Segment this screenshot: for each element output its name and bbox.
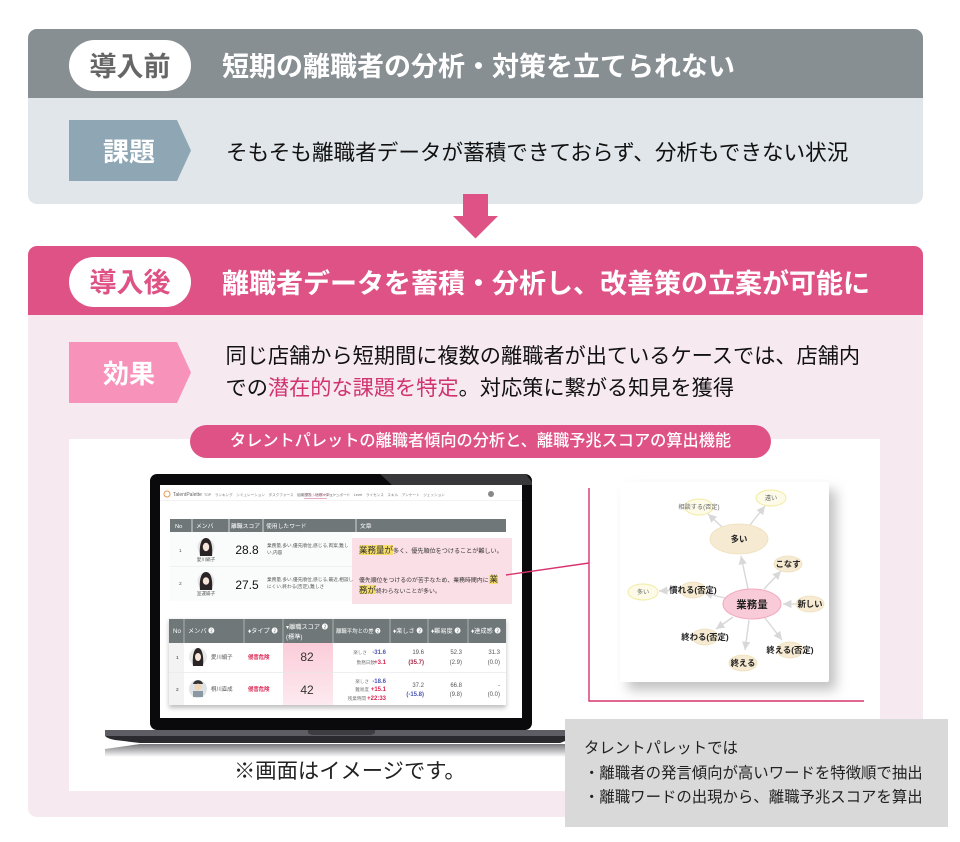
note: image only: ※画面はイメージです。 — [234, 759, 466, 783]
table: score: (-15.8) — [406, 692, 424, 698]
before header band — [28, 29, 923, 98]
table: score — [169, 619, 506, 708]
connector line and bracket — [506, 488, 864, 701]
table: score: - — [498, 683, 500, 689]
table: score: ♦達成感 ❷ — [471, 627, 501, 635]
table: score: 桐川直成 — [211, 685, 233, 693]
table: score: 離職平均との差 ❷ — [336, 627, 381, 635]
table: score: (0.0) — [488, 660, 500, 666]
callout text: ・離職者の発言傾向が高いワードを特徴順で抽出 — [584, 764, 923, 782]
word network card: 業務量 — [736, 598, 768, 611]
table: score: No — [173, 628, 181, 635]
table: score: 2 — [176, 687, 179, 693]
word network card: 相談する(否定) — [678, 503, 720, 511]
table: score: 楽しさ — [353, 649, 367, 656]
table: retention words: 愛川絹子 — [197, 556, 216, 563]
arrow: down — [453, 194, 498, 238]
table: score: メンバ ❷ — [188, 627, 214, 635]
table: score: +3.1 — [374, 660, 387, 666]
callout text: ・離職ワードの出現から、離職予兆スコアを算出 — [584, 789, 923, 806]
laptop — [105, 474, 578, 757]
table: score: 愛川絹子 — [211, 653, 233, 661]
issue text: そもそも離職者データが蓄積できておらず、分析もできない状況 — [226, 140, 848, 165]
table: score: 難易度 — [355, 686, 369, 693]
table: retention words: 2 — [179, 581, 182, 587]
callout text: タレントパレットでは — [584, 740, 738, 757]
word network card: こなす — [775, 559, 801, 569]
table: score: (0.0) — [488, 692, 500, 698]
word network card: 新しい — [797, 599, 823, 609]
table: retention words: 使用したワード — [266, 522, 307, 530]
table: score: -31.6 — [372, 650, 387, 656]
app nav bar: ダッシュボード Level ライセンス スキル アンケート ジェッション — [325, 492, 445, 497]
table: retention words: 1 — [179, 548, 182, 554]
table: retention words: い,内容 — [267, 549, 283, 556]
before heading: 短期の離職者の分析・対策を立てられない — [222, 52, 735, 82]
table: score: 37.2 — [412, 683, 425, 689]
subtitle pill: タレントパレットの離職者傾向の分析と、離職予兆スコアの算出機能 — [230, 432, 731, 450]
table: score: 52.3 — [450, 650, 463, 656]
word network card: 多い — [731, 534, 747, 544]
after pill background — [69, 257, 191, 307]
table: retention words — [170, 519, 512, 604]
effect text — [226, 345, 860, 400]
table: score: 楽しさ — [355, 678, 369, 685]
after header band — [28, 246, 923, 315]
table: retention words: 文章 — [360, 522, 372, 530]
panel: before — [28, 29, 923, 204]
table: score: 勤務日数 — [357, 659, 375, 666]
table: retention words: にくい,終わる(否定),難しさ — [267, 583, 325, 590]
table: score: 82 — [300, 650, 314, 664]
before pill label: 導入前 — [90, 52, 170, 82]
table: score: ♦難易度 ❷ — [431, 627, 461, 635]
after heading: 離職者データを蓄積・分析し、改善策の立案が可能に — [222, 269, 870, 299]
table: score: +15.1 — [371, 687, 387, 693]
white content area — [69, 439, 880, 791]
table: retention words: メンバ — [196, 523, 214, 530]
table: score: 侵害危険 — [248, 653, 270, 661]
table: score: 66.8 — [450, 683, 463, 689]
table: score: 残業時間 — [348, 695, 366, 702]
effect text: 同じ店舗から短期間に複数の離職者が出ているケースでは、店舗内 — [226, 345, 860, 368]
table: retention words: 優先順位をつけるのが苦手なため、業務時間内に — [359, 578, 489, 584]
word network card: 慣れる(否定) — [669, 585, 717, 595]
word network card — [620, 482, 836, 690]
callout: summary — [565, 719, 948, 827]
app nav bar: TOP ランキング シミュレーション タスクフォース 組織图表 研修メニュー — [204, 492, 337, 497]
table: score: ♦楽しさ ❷ — [393, 627, 423, 635]
word network card: 終える(否定) — [766, 645, 814, 655]
before pill background — [69, 40, 191, 91]
table: score: 31.3 — [488, 650, 501, 656]
table: score: 42 — [300, 683, 314, 697]
table: score: ▾離職スコア ❷ — [286, 623, 328, 631]
effect text: での潜在的な課題を特定。対応策に繋がる知見を獲得 — [226, 377, 734, 400]
issue chevron — [69, 120, 191, 181]
word network card: 遠い — [765, 494, 777, 502]
callout text — [584, 740, 923, 806]
word network card: 終える — [731, 658, 755, 668]
table: score: ♦タイプ ❷ — [248, 627, 278, 635]
table: score: (9.8) — [450, 692, 462, 698]
effect chevron — [69, 342, 191, 403]
issue chevron label: 課題 — [103, 137, 155, 167]
table: score: 侵害危険 — [248, 685, 270, 693]
table: score: (35.7) — [408, 660, 424, 666]
app nav bar — [160, 491, 522, 501]
app nav bar: ダッシュボード — [305, 492, 331, 497]
table: retention words: 業務量,多い,優先順位,感じる,最近,相談し — [267, 576, 354, 583]
table: score: +22:33 — [367, 696, 387, 702]
table: retention words: 業務量,多い,優先順位,感じる,両案,難し — [267, 542, 349, 549]
table: retention words: 28.8 — [235, 543, 259, 557]
table: score: (2.9) — [450, 660, 462, 666]
table: retention words: 27.5 — [235, 578, 259, 592]
table: score: 1 — [176, 655, 179, 661]
word network card: 終わる(否定) — [681, 632, 729, 642]
after pill label: 導入後 — [90, 268, 170, 298]
table: score: (標準) — [286, 633, 302, 641]
table: retention words: 離職スコア — [231, 522, 260, 530]
table: retention words: No — [175, 524, 182, 530]
app nav bar: TalentPalette — [173, 492, 202, 498]
table: retention words: 業務量が多く、優先順位をつけることが難しい。 — [359, 545, 503, 555]
table: score: -18.6 — [372, 679, 387, 685]
word network card: 多い — [637, 588, 649, 596]
table: retention words: 室運緋子 — [197, 590, 216, 597]
table: retention words: 業 — [490, 574, 498, 584]
subtitle pill — [190, 425, 771, 458]
effect chevron label: 効果 — [103, 359, 155, 389]
table: score: 19.6 — [412, 650, 425, 656]
table: retention words: 務が終わらないことが多い。 — [359, 585, 441, 595]
panel: after — [28, 246, 923, 817]
